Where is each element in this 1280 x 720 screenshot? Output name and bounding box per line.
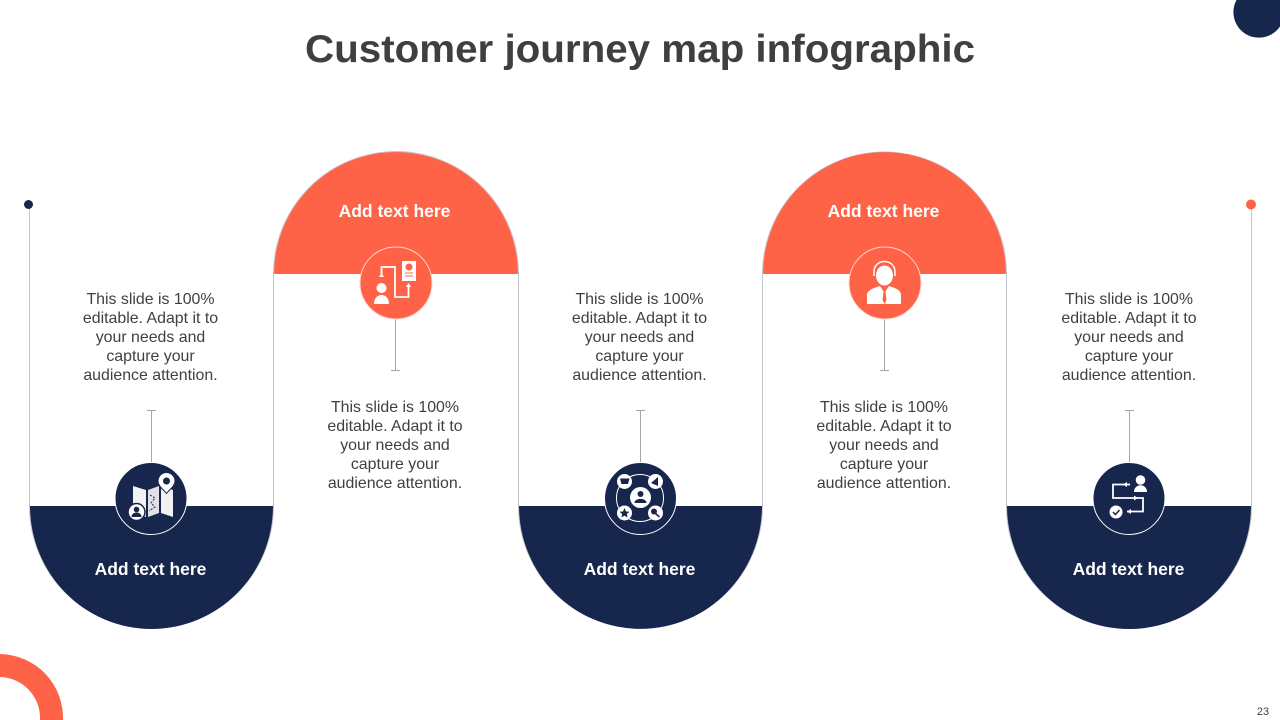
step 1 heading: Add text here (95, 559, 207, 579)
step 3 header shape (519, 506, 762, 629)
icon: person and document flow (360, 247, 432, 319)
step 4 text: This slide is 100% (820, 399, 948, 416)
panel: step 5 (1007, 291, 1251, 629)
step 4 heading: Add text here (828, 201, 940, 221)
step 1 connector (147, 410, 156, 462)
title: Customer journey map infographic (305, 28, 975, 71)
step 3 heading: Add text here (584, 559, 696, 579)
icon: support agent with headset (849, 247, 921, 319)
serpentine journey path (30, 152, 1252, 628)
step 4 text: editable. Adapt it to (816, 418, 952, 435)
step 1 text: your needs and (96, 329, 205, 346)
step 1 text: capture your (106, 348, 195, 365)
step 1 header shape (30, 506, 273, 629)
step 5 connector (1125, 410, 1134, 462)
step 3 text: capture your (595, 348, 684, 365)
step 4 connector (880, 319, 889, 370)
panel: step 4 (763, 152, 1006, 492)
step 3 text: This slide is 100% (575, 291, 704, 308)
step 2 heading: Add text here (339, 201, 451, 221)
step 3 connector (636, 410, 645, 462)
end dot (1246, 200, 1256, 210)
step 4 text: your needs and (829, 437, 939, 454)
step 5 text: capture your (1085, 348, 1174, 365)
step 2 text: audience attention. (328, 475, 462, 492)
icon: customer touchpoints (604, 462, 676, 534)
panel: step 2 (274, 152, 518, 492)
step 2 text: capture your (351, 456, 440, 473)
step 2 text: This slide is 100% (331, 399, 459, 416)
icon: map with pin (115, 462, 187, 534)
step 1 text: audience attention. (83, 367, 218, 384)
step 5 text: your needs and (1074, 329, 1184, 346)
step 3 text: audience attention. (572, 367, 707, 384)
page number: 23 (1257, 706, 1269, 718)
decorative corner circle: top right (1233, 0, 1280, 38)
step 4 header shape (763, 152, 1006, 274)
icon: process flow with person and check (1093, 462, 1165, 534)
step 3 text: editable. Adapt it to (572, 310, 707, 327)
start dot (24, 200, 33, 209)
step 4 text: capture your (840, 456, 929, 473)
step 5 text: audience attention. (1062, 367, 1196, 384)
step 5 text: This slide is 100% (1065, 291, 1193, 308)
decorative corner ring: bottom left (0, 654, 63, 720)
step 5 text: editable. Adapt it to (1061, 310, 1197, 327)
step 3 text: your needs and (585, 329, 694, 346)
step 1 text: editable. Adapt it to (83, 310, 218, 327)
panel: step 3 (519, 291, 762, 629)
step 5 header shape (1007, 506, 1251, 629)
step 4 text: audience attention. (817, 475, 951, 492)
step 2 header shape (274, 152, 518, 274)
step 2 connector (391, 319, 400, 370)
panel: step 1 (30, 291, 273, 629)
step 2 text: your needs and (340, 437, 450, 454)
step 5 heading: Add text here (1073, 559, 1185, 579)
step 1 text: This slide is 100% (86, 291, 215, 308)
step 2 text: editable. Adapt it to (327, 418, 463, 435)
